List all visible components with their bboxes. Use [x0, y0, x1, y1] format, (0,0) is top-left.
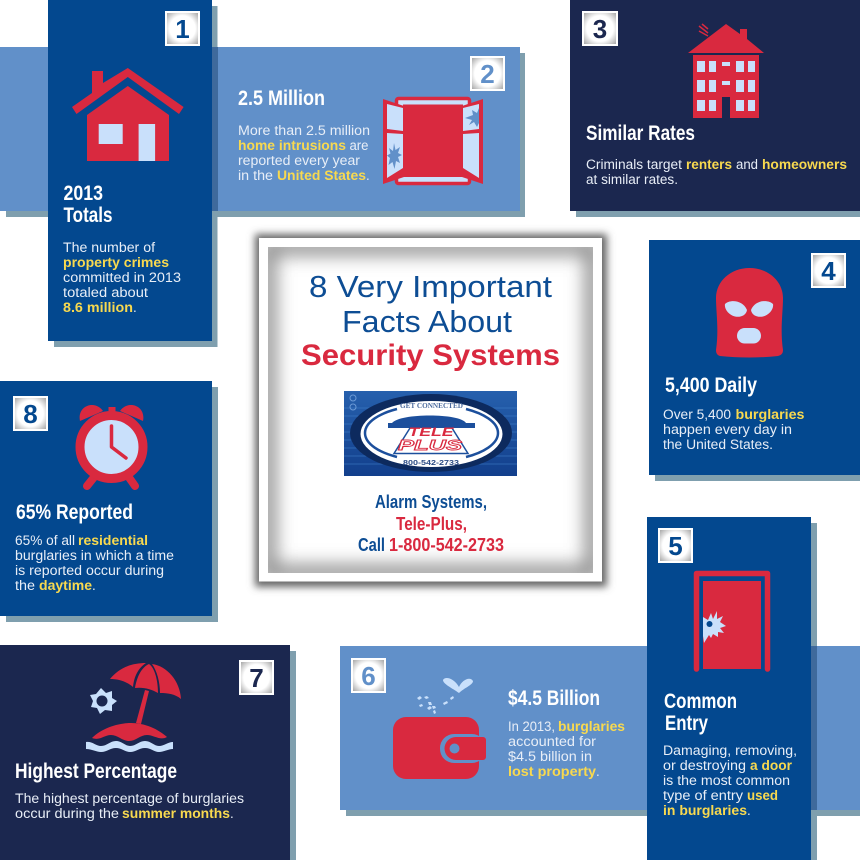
- text block: call to action: Alarm Systems,: [375, 491, 487, 512]
- text block: a door used in burglaries: is the most common: [663, 773, 790, 788]
- badge: 7: 7: [249, 663, 264, 693]
- text block: residential daytime: the: [15, 578, 35, 593]
- text block: summer months: summer months: [122, 806, 230, 821]
- text block: property crimes: .: [133, 300, 137, 315]
- badge: 4: [811, 253, 846, 288]
- text block: lost property: lost property: [508, 764, 597, 779]
- logo: Tele-Plus: TELE: [408, 427, 454, 439]
- text block: call to action: 1-800-542-2733: [389, 534, 504, 555]
- text block: home intrusions: .: [366, 168, 370, 183]
- panel 6: $4.5 Billion: [340, 646, 860, 816]
- heading: 2.5 Million: 2.5 Million: [238, 87, 325, 110]
- text block: residential daytime: daytime: [39, 578, 92, 593]
- text block: lost property: burglaries: [558, 719, 625, 734]
- text block: burglaries: Over 5,400: [663, 407, 731, 422]
- title: 8 Very Important: [309, 269, 552, 304]
- text block: home intrusions: are: [350, 138, 368, 153]
- title: [301, 269, 560, 372]
- text block: call to action: Tele-Plus,: [396, 513, 467, 534]
- text block: call to action: [358, 491, 504, 555]
- panel 2: 2.5 Million: [0, 47, 525, 217]
- text block: residential daytime: 65% of all: [15, 533, 75, 548]
- text block: residential daytime: [15, 533, 174, 593]
- text block: lost property: .: [596, 764, 600, 779]
- badge: 2: [470, 56, 505, 91]
- icon: house: [72, 68, 184, 161]
- heading: Common Entry: Entry: [665, 712, 708, 735]
- text block: renters and homeowners: homeowners: [762, 157, 847, 172]
- badge: 6: 6: [361, 661, 376, 691]
- text block: home intrusions: reported every year: [238, 153, 361, 168]
- text block: renters and homeowners: Criminals target: [586, 157, 682, 172]
- icon: alarm clock: [80, 405, 143, 486]
- icon: ski mask: [716, 268, 783, 358]
- text block: residential daytime: burglaries in which a time: [15, 548, 174, 563]
- text block: burglaries: [663, 407, 804, 452]
- text block: renters and homeowners: [586, 157, 847, 187]
- icon: broken window: [383, 98, 483, 184]
- text block: home intrusions: More than 2.5 million: [238, 123, 370, 138]
- text block: home intrusions: [238, 123, 370, 183]
- panel 3: Similar Rates: [570, 0, 860, 217]
- logo: Tele-Plus: [344, 391, 517, 476]
- heading: $4.5 Billion: $4.5 Billion: [508, 687, 600, 710]
- title: Facts About: [342, 304, 512, 339]
- badge: 1: 1: [175, 14, 190, 44]
- text block: a door used in burglaries: .: [747, 803, 751, 818]
- icon: beach umbrella: [86, 663, 181, 752]
- text block: home intrusions: home intrusions: [238, 138, 346, 153]
- text block: home intrusions: in the: [238, 168, 273, 183]
- text block: lost property: In 2013,: [508, 719, 555, 734]
- text block: summer months: [15, 791, 244, 821]
- icon: apartment building: [688, 24, 764, 118]
- heading: Common Entry: [664, 690, 737, 735]
- badge: 3: [582, 11, 618, 46]
- heading: 2013 Totals: 2013: [64, 182, 103, 205]
- text block: lost property: accounted for: [508, 734, 597, 749]
- icon: wallet: [393, 678, 486, 779]
- text block: summer months: The highest percentage of burglaries: [15, 791, 244, 806]
- badge: 8: 8: [23, 399, 38, 429]
- text block: call to action: Call: [358, 534, 385, 555]
- badge: 7: [239, 660, 274, 695]
- text block: burglaries: happen every day in: [663, 422, 792, 437]
- text block: a door used in burglaries: a door: [750, 758, 793, 773]
- title: Security Systems: [301, 339, 560, 372]
- heading: Similar Rates: Similar Rates: [586, 122, 695, 145]
- panel: center title card: [255, 234, 607, 587]
- panel 8: 65% Reported: [0, 381, 218, 622]
- text block: a door used in burglaries: or destroying: [663, 758, 746, 773]
- text block: a door used in burglaries: used: [747, 788, 778, 803]
- text block: property crimes: [63, 240, 181, 315]
- text block: residential daytime: residential: [78, 533, 148, 548]
- logo: Tele-Plus: 800-542-2733: [403, 458, 459, 467]
- text block: summer months: occur during the: [15, 806, 119, 821]
- heading: Common Entry: Common: [664, 690, 737, 713]
- text block: property crimes: property crimes: [63, 255, 169, 270]
- heading: 5,400 Daily: 5,400 Daily: [665, 374, 757, 397]
- text block: residential daytime: is reported occur during: [15, 563, 164, 578]
- heading: 65% Reported: 65% Reported: [16, 501, 133, 524]
- panel 1: 2013 Totals: [48, 0, 218, 347]
- heading: 2013 Totals: Totals: [64, 204, 112, 227]
- panel 7: Highest Percentage: [0, 645, 296, 860]
- badge: 5: 5: [668, 531, 683, 561]
- text block: property crimes: The number of: [63, 240, 155, 255]
- badge: 4: 4: [821, 256, 836, 286]
- panel 5: Common Entry: [647, 517, 817, 860]
- logo: Tele-Plus: GET CONNECTED: [400, 402, 463, 410]
- text block: renters and homeowners: at similar rates.: [586, 172, 678, 187]
- text block: renters and homeowners: renters: [686, 157, 732, 172]
- text block: renters and homeowners: and: [736, 157, 758, 172]
- text block: lost property: $4.5 billion in: [508, 749, 592, 764]
- text block: burglaries: the United States.: [663, 437, 773, 452]
- text block: summer months: .: [230, 806, 234, 821]
- badge: 3: 3: [593, 14, 607, 44]
- icon: damaged door: [696, 574, 768, 669]
- text block: a door used in burglaries: in burglaries: [663, 803, 747, 818]
- text block: property crimes: 8.6 million: [63, 300, 133, 315]
- badge: 2: 2: [480, 59, 495, 89]
- text block: home intrusions: United States: [277, 168, 366, 183]
- badge: 8: [13, 396, 48, 431]
- heading: 2013 Totals: [64, 182, 112, 227]
- text block: residential daytime: .: [92, 578, 96, 593]
- badge: 5: [658, 528, 693, 563]
- badge: 6: [351, 658, 386, 693]
- text block: property crimes: totaled about: [63, 285, 148, 300]
- text block: property crimes: committed in 2013: [63, 270, 181, 285]
- heading: Highest Percentage: Highest Percentage: [15, 760, 177, 783]
- text block: a door used in burglaries: type of entry: [663, 788, 743, 803]
- text block: a door used in burglaries: [663, 743, 797, 818]
- text block: a door used in burglaries: Damaging, removing,: [663, 743, 797, 758]
- text block: burglaries: burglaries: [736, 407, 804, 422]
- logo: Tele-Plus: PLUS: [398, 437, 462, 454]
- panel 4: 5,400 Daily: [649, 240, 860, 481]
- badge: 1: [165, 11, 200, 46]
- text block: lost property: [508, 719, 625, 779]
